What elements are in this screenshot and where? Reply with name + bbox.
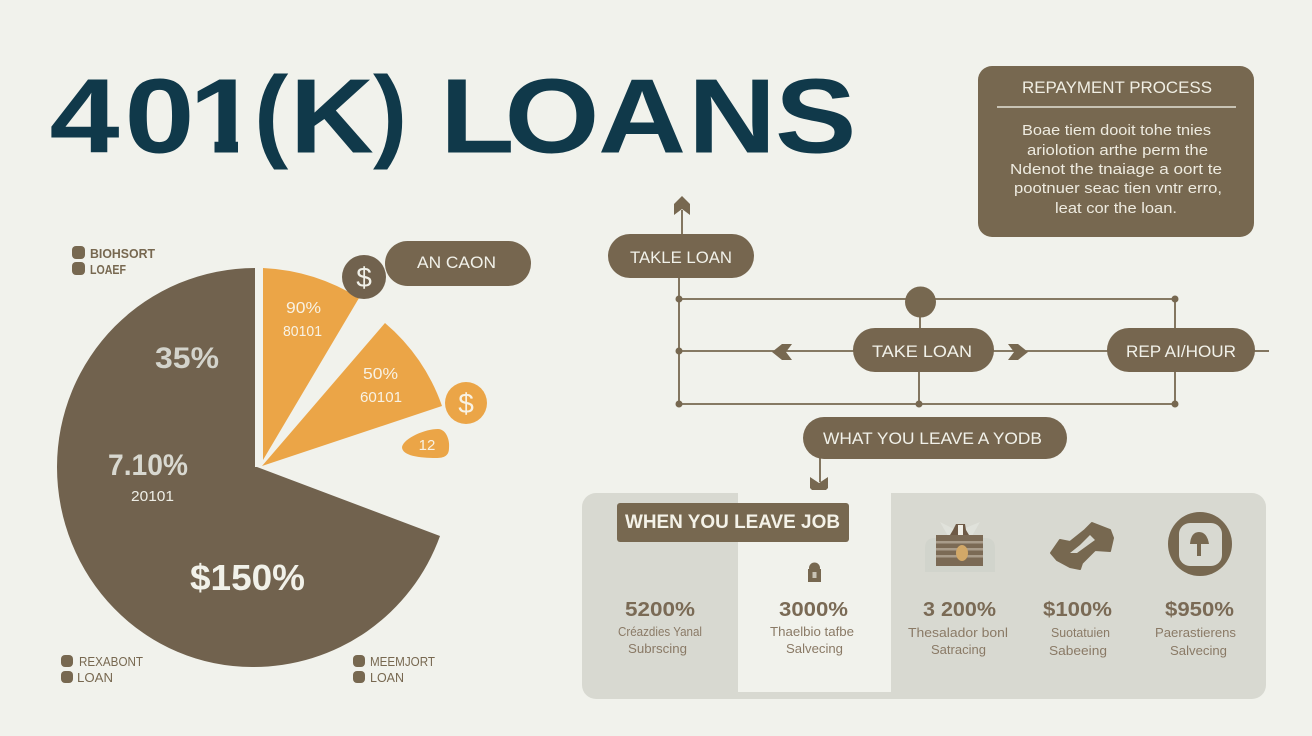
icon: briefcase	[925, 522, 995, 572]
stat column 5: Salvecing	[1170, 643, 1227, 658]
callout: 12: 12	[419, 437, 435, 454]
legend: top left: BIOHSORT	[90, 247, 155, 261]
stat column 3: Thesalador bonl	[908, 625, 1008, 640]
icon: dollar badge dark	[342, 255, 386, 299]
pie slice: orange lower: 60101	[360, 389, 402, 406]
legend: bottom right: LOAN	[370, 670, 404, 685]
legend: bottom right	[353, 654, 435, 685]
stat column 3: 3 200%	[923, 599, 996, 621]
stat column 4: $100%	[1043, 599, 1112, 621]
callout: an caon: AN CAON	[417, 253, 496, 272]
flowchart	[608, 196, 1269, 497]
panel: repayment process: REPAYMENT PROCESS	[1022, 78, 1212, 97]
icon: dollar badge dark: $	[356, 262, 372, 293]
arrow: up	[674, 196, 690, 215]
panel: repayment process: Boae tiem dooit tohe tnies	[1022, 122, 1211, 139]
highlighted column	[738, 490, 891, 692]
pie slice: orange lower: 50%	[363, 366, 398, 383]
pie slice: brown: 35%	[155, 342, 219, 375]
node: take loan top	[608, 234, 754, 278]
title: 401	[50, 57, 259, 175]
flowchart hub node	[905, 286, 936, 318]
stat column 2: Salvecing	[786, 641, 843, 656]
legend: top left: LOAEF	[90, 263, 126, 277]
pie slice: orange upper: 80101	[283, 323, 322, 340]
pie slice: brown: $150%	[190, 557, 305, 598]
panel: repayment process: Ndenot the tnaiage a oort te	[1010, 161, 1222, 178]
pie slice: orange upper	[263, 268, 359, 460]
node: take loan middle	[853, 328, 994, 372]
heading	[617, 503, 849, 542]
callout: 12	[402, 429, 449, 458]
node: repay: REP AI/HOUR	[1126, 342, 1236, 361]
pie slice: orange upper: 90%	[286, 300, 321, 317]
node: repay	[1107, 328, 1255, 372]
arrow: left	[772, 344, 792, 360]
stat column 4: Suotatuien	[1051, 625, 1110, 640]
legend: bottom left: LOAN	[77, 670, 113, 685]
flowchart connectors	[679, 210, 1269, 482]
stat column 4	[1043, 599, 1112, 658]
pie slice: brown: 7.10%	[108, 449, 188, 482]
icon: dollar badge orange	[445, 382, 487, 424]
pie chart	[57, 268, 442, 667]
icon: small lock	[808, 562, 821, 582]
panel: repayment process	[978, 66, 1254, 237]
legend: bottom right: MEEMJORT	[370, 654, 435, 669]
stat column 5: $950%	[1165, 599, 1234, 621]
flowchart junction dots	[676, 296, 1178, 408]
panel: repayment process: ariolotion arthe perm the	[1027, 142, 1208, 159]
heading: WHEN YOU LEAVE JOB	[625, 512, 840, 533]
stat column 5	[1155, 599, 1236, 658]
icon: ring badge	[1168, 512, 1232, 576]
node: take loan middle: TAKE LOAN	[872, 342, 972, 361]
stat column 4: Sabeeing	[1049, 643, 1107, 658]
node: what you leave	[803, 417, 1067, 459]
stat column 1: Subrscing	[628, 641, 687, 656]
icon: wrench	[1051, 523, 1113, 569]
stat column 5: Paerastierens	[1155, 625, 1236, 640]
stat column 1	[618, 599, 702, 656]
stat column 1: 5200%	[625, 599, 695, 621]
icon: dollar badge orange: $	[458, 388, 474, 419]
panel: repayment process: leat cor the loan.	[1055, 200, 1177, 217]
stat column 2: Thaelbio tafbe	[770, 624, 854, 639]
arrow: right	[1008, 344, 1028, 360]
stat column 2	[770, 599, 854, 656]
legend: bottom left	[61, 654, 143, 685]
pie slice: brown: 20101	[131, 488, 174, 505]
callout: an caon	[385, 241, 531, 286]
title: LOANS	[440, 57, 856, 176]
arrow: down	[810, 477, 828, 497]
stat column 2: 3000%	[779, 599, 848, 621]
stat column 3	[908, 599, 1008, 657]
node: take loan top: TAKLE LOAN	[630, 248, 732, 267]
stat column 3: Satracing	[931, 642, 986, 657]
title: K	[290, 56, 374, 175]
node: what you leave: WHAT YOU LEAVE A YODB	[823, 429, 1042, 448]
title	[50, 55, 856, 176]
pie slice: brown	[57, 268, 440, 667]
panel: repayment process: pootnuer seac tien vntr erro,	[1014, 180, 1222, 197]
legend: top left	[72, 246, 155, 277]
pie slice: orange lower	[262, 323, 442, 466]
stat column 1: Créazdies Yanal	[618, 624, 702, 639]
title: (	[254, 55, 289, 170]
panel: when you leave job	[582, 490, 1266, 699]
legend: bottom left: REXABONT	[79, 654, 143, 669]
title: )	[373, 55, 407, 170]
